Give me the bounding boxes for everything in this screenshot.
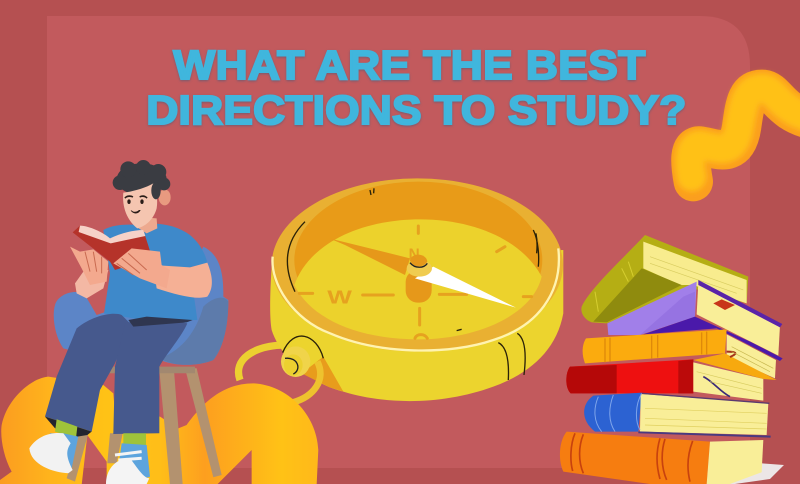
neck <box>135 217 157 233</box>
ear <box>159 189 171 205</box>
needle hub <box>407 260 432 277</box>
hair <box>113 160 170 195</box>
left arm <box>75 270 108 298</box>
chair back and arms <box>54 247 228 365</box>
eyebrows, eyes and mouth <box>124 195 148 213</box>
needle hub shadow <box>406 270 432 303</box>
compass dial face <box>294 219 542 339</box>
seat shadow <box>128 317 193 327</box>
face <box>123 183 157 228</box>
bookmark <box>713 299 735 310</box>
compass needle orange <box>329 238 410 275</box>
socks <box>55 419 146 445</box>
left shoe <box>29 433 78 473</box>
book red <box>73 226 152 270</box>
left hand <box>70 247 108 285</box>
compass needle white <box>415 267 516 308</box>
compass knob <box>281 346 310 377</box>
stack of books <box>560 235 784 484</box>
compass pendant ring <box>239 345 287 380</box>
dial letters <box>327 246 420 307</box>
book 3: amber <box>583 329 777 380</box>
book 2: purple <box>607 280 783 361</box>
title: WHAT ARE THE BEST <box>173 42 645 89</box>
dial letters: N <box>409 246 420 263</box>
compass rim <box>272 178 563 352</box>
book 5: blue <box>584 393 771 437</box>
chair side shell <box>160 298 228 365</box>
second ring <box>293 362 320 402</box>
bottom left yellow wave <box>0 377 318 484</box>
man reading on chair <box>29 160 228 484</box>
compass body <box>270 250 563 401</box>
title: DIRECTIONS TO STUDY? <box>146 87 686 134</box>
rim highlight <box>272 248 559 351</box>
jeans <box>45 314 187 434</box>
compass inner wall <box>294 182 542 338</box>
book 1: olive <box>581 235 748 323</box>
chair legs <box>67 367 222 484</box>
right hand <box>113 248 170 288</box>
black scratch lines <box>283 188 539 380</box>
icon: top right yellow squiggle <box>690 88 800 182</box>
title <box>146 42 686 134</box>
shirt <box>103 224 207 321</box>
compass <box>239 178 563 402</box>
dial letters: W <box>327 286 353 307</box>
cuff shadows <box>45 417 92 437</box>
compass strap <box>302 357 343 392</box>
right shoe <box>106 443 150 484</box>
side lock of hair <box>151 182 161 199</box>
book 6: orange <box>560 432 784 484</box>
book 4: red <box>566 359 763 401</box>
right arm <box>153 263 212 298</box>
dial markings <box>299 226 532 338</box>
